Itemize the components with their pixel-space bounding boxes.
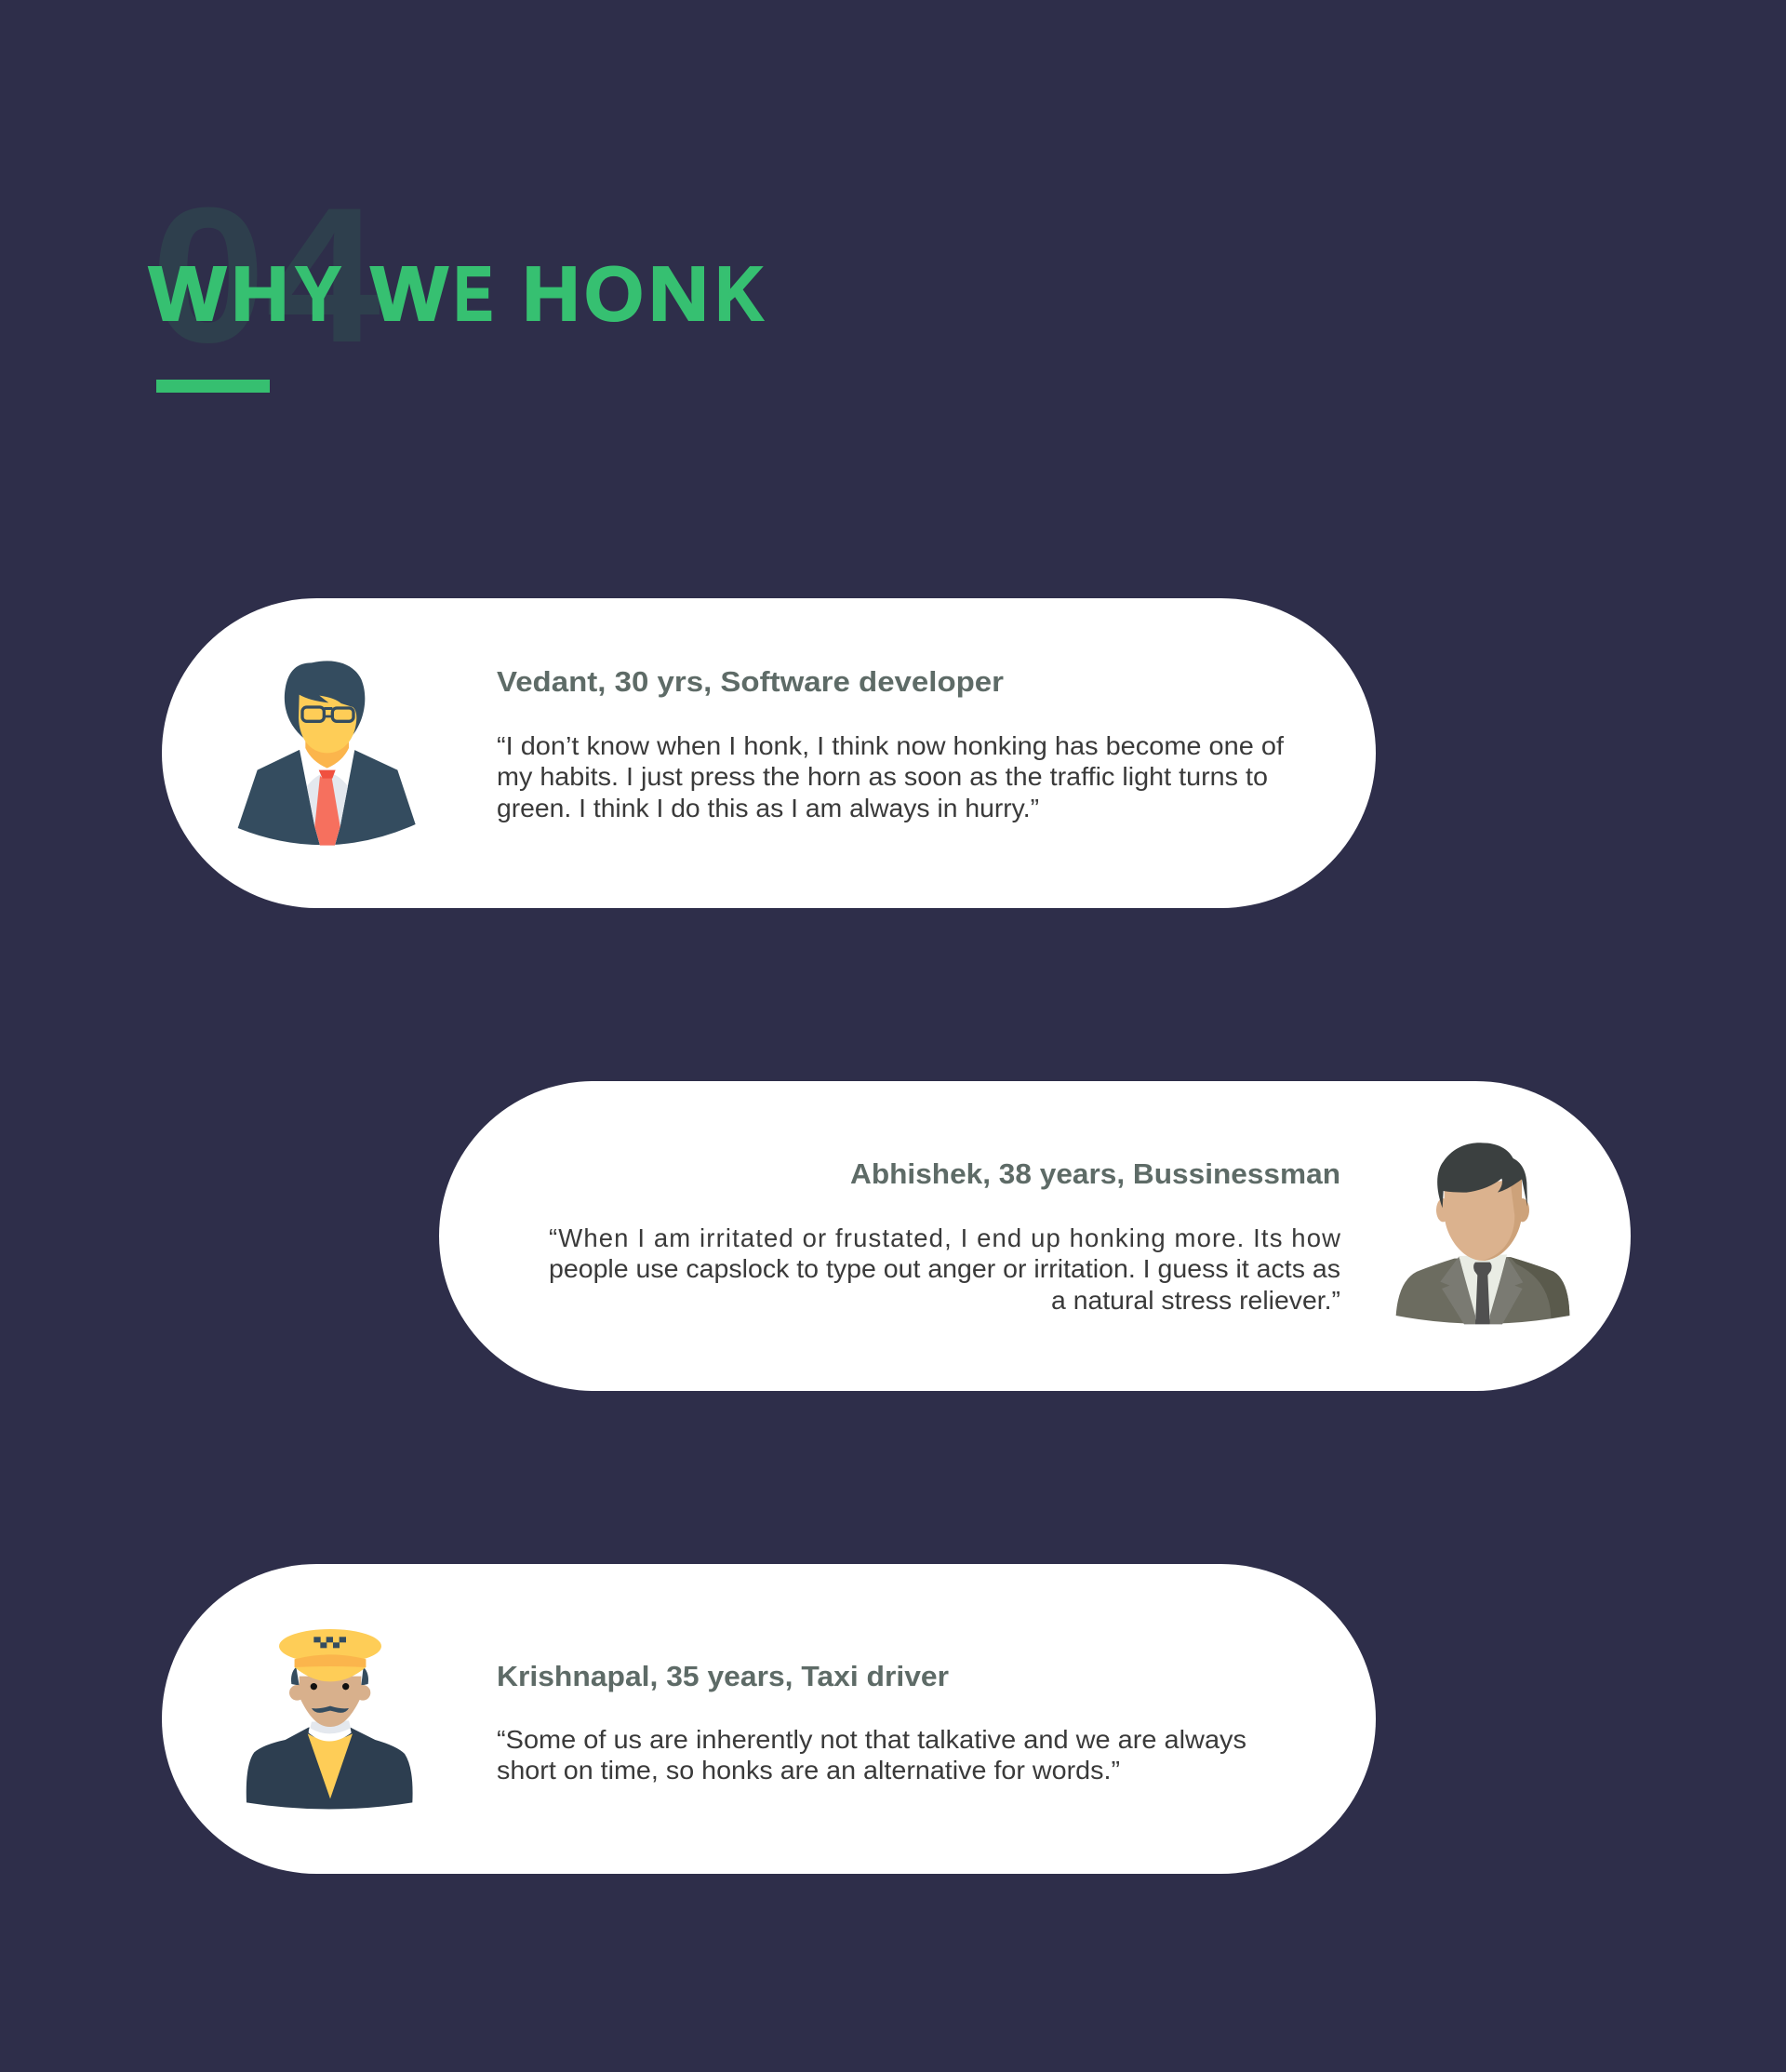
title: W bbox=[370, 250, 448, 337]
icon: businessman avatar bbox=[1396, 1143, 1569, 1324]
title underline bbox=[156, 380, 270, 393]
name: Abhishek: Abhishek, 38 years, Bussinessman bbox=[850, 1157, 1340, 1190]
quote: Abhishek bbox=[549, 1223, 1340, 1315]
quote: Abhishek: “When I am irritated or frustated, I end up honking more. Its how bbox=[549, 1223, 1340, 1252]
name: Vedant: Vedant, 30 yrs, Software developer bbox=[497, 665, 1004, 698]
title: O bbox=[584, 250, 644, 337]
title: K bbox=[715, 250, 764, 337]
section number: 04: 04 bbox=[151, 167, 380, 382]
quote: Krishnapal: “Some of us are inherently not that talkative and we are always bbox=[497, 1725, 1246, 1754]
panel: Vedant testimonial bbox=[162, 598, 1376, 908]
title: E bbox=[454, 250, 493, 337]
title: N bbox=[648, 250, 709, 337]
title bbox=[149, 250, 764, 337]
title: H bbox=[231, 250, 288, 337]
quote: Krishnapal: short on time, so honks are an alternative for words.” bbox=[497, 1756, 1120, 1785]
icon: software developer avatar bbox=[238, 661, 416, 846]
quote: Krishnapal bbox=[497, 1725, 1246, 1785]
quote: Vedant bbox=[497, 731, 1284, 822]
icon: taxi driver avatar bbox=[247, 1629, 413, 1809]
quote: Vedant: green. I think I do this as I am always in hurry.” bbox=[497, 794, 1039, 822]
quote: Abhishek: people use capslock to type out anger or irritation. I guess it acts as bbox=[549, 1254, 1340, 1283]
panel: Krishnapal testimonial bbox=[162, 1564, 1376, 1874]
quote: Vedant: “I don’t know when I honk, I think now honking has become one of bbox=[497, 731, 1284, 760]
title: W bbox=[149, 250, 227, 337]
panel: Abhishek testimonial bbox=[439, 1081, 1631, 1391]
title: Y bbox=[295, 250, 341, 337]
name: Krishnapal: Krishnapal, 35 years, Taxi driver bbox=[497, 1660, 949, 1692]
quote: Abhishek: a natural stress reliever.” bbox=[1051, 1286, 1340, 1315]
quote: Vedant: my habits. I just press the horn as soon as the traffic light turns to bbox=[497, 762, 1268, 791]
title: H bbox=[523, 250, 580, 337]
